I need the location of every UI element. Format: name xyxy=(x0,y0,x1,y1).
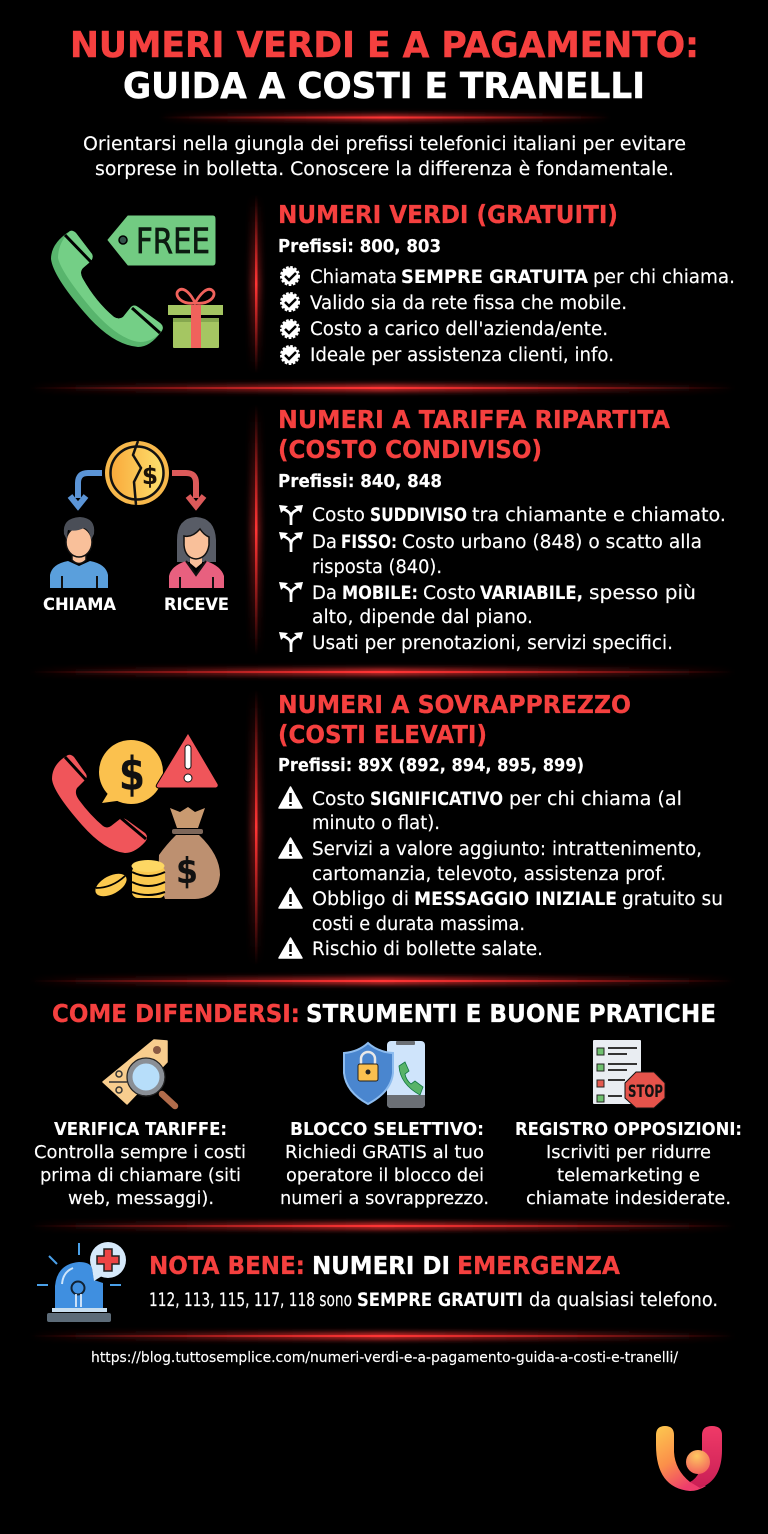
heading: NUMERI A TARIFFA RIPARTITA xyxy=(278,405,671,434)
icon: price tag with magnifier xyxy=(103,1040,175,1106)
bullet list: Servizi a valore aggiunto: intrattenimento, xyxy=(312,839,702,860)
prefixes: Prefissi: 800, 803 xyxy=(278,236,441,257)
icon: list with stop sign xyxy=(593,1040,665,1108)
heading xyxy=(278,405,671,464)
column text: numeri a sovrapprezzo. xyxy=(280,1188,489,1209)
icon: green phone, free tag and gift xyxy=(51,216,223,348)
bullet list xyxy=(279,505,726,654)
bullet list: per chi chiama. xyxy=(593,267,735,288)
column text: REGISTRO OPPOSIZIONI: xyxy=(515,1119,742,1140)
bullet list: risposta (840). xyxy=(312,557,442,578)
bullet list: MOBILE: xyxy=(342,583,418,604)
bullet list: Costo xyxy=(312,789,365,810)
column text: chiamate indesiderate. xyxy=(526,1188,731,1209)
icon: split coin with caller and receiver: CHIAMA xyxy=(43,595,116,614)
heading: NOTA BENE: xyxy=(149,1251,305,1280)
heading: come difendersi: STRUMENTI E BUONE PRATICHE xyxy=(306,999,716,1028)
panel: numeri verdi xyxy=(51,195,735,373)
panel: nota bene xyxy=(37,1242,718,1322)
column text xyxy=(515,1119,742,1209)
bullet list: Rischio di bollette salate. xyxy=(312,939,543,960)
bullet list: Costo xyxy=(423,583,476,604)
title xyxy=(70,25,699,107)
intro text: sorprese in bolletta. Conoscere la differenza è fondamentale. xyxy=(95,159,674,180)
column text: Richiedi GRATIS al tuo xyxy=(285,1142,484,1163)
column: registro opposizioni xyxy=(515,1040,742,1209)
heading: NUMERI DI xyxy=(312,1251,450,1280)
heading: come difendersi xyxy=(52,999,716,1028)
bullet list xyxy=(282,267,735,366)
heading: NUMERI VERDI (GRATUITI) xyxy=(278,200,618,229)
bullet list: Costo a carico dell'azienda/ente. xyxy=(310,319,608,340)
column text: telemarketing e xyxy=(557,1165,700,1186)
bullet list: gratuito su xyxy=(622,889,723,910)
icon: list with stop sign: STOP xyxy=(628,1082,663,1102)
bullet list: costi e durata massima. xyxy=(312,914,525,935)
heading: (COSTI ELEVATI) xyxy=(278,720,487,749)
title: GUIDA A COSTI E TRANELLI xyxy=(123,66,645,107)
bullet list: spesso più xyxy=(589,583,696,604)
title: NUMERI VERDI E A PAGAMENTO: xyxy=(70,25,699,66)
intro text: Orientarsi nella giungla dei prefissi telefonici italiani per evitare xyxy=(83,134,686,155)
bullet list: Costo urbano (848) o scatto alla xyxy=(402,532,702,553)
column text: prima di chiamare (siti xyxy=(40,1165,241,1186)
icon: emergency siren xyxy=(37,1242,126,1322)
column text: Iscriviti per ridurre xyxy=(546,1142,711,1163)
bullet list: Costo xyxy=(312,505,365,526)
bullet list: SEMPRE GRATUITA xyxy=(401,267,589,288)
icon: red phone, warning and money: $ xyxy=(119,747,145,801)
heading: come difendersi: COME DIFENDERSI: xyxy=(52,999,300,1028)
bullet list xyxy=(279,787,723,960)
source url: https://blog.tuttosemplice.com/numeri-verdi-e-a-pagamento-guida-a-costi-e-tranelli/ xyxy=(91,1350,678,1366)
emergency numbers text xyxy=(149,1290,718,1311)
bullet list: Ideale per assistenza clienti, info. xyxy=(310,345,614,366)
heading xyxy=(149,1251,621,1280)
icon: split coin with caller and receiver: RICEVE xyxy=(164,595,229,614)
heading xyxy=(278,690,631,749)
column text xyxy=(280,1119,489,1209)
column text: Controlla sempre i costi xyxy=(34,1142,246,1163)
heading: (COSTO CONDIVISO) xyxy=(278,435,542,464)
bullet list: Chiamata xyxy=(310,267,397,288)
bullet list: Usati per prenotazioni, servizi specifici. xyxy=(312,633,673,654)
emergency numbers text: da qualsiasi telefono. xyxy=(529,1290,718,1311)
icon: red phone, warning and money: $ xyxy=(176,851,198,892)
emergency numbers text: 112, 113, 115, 117, 118 sono xyxy=(149,1290,352,1311)
intro text xyxy=(83,134,686,180)
icon: shield and phone xyxy=(344,1041,425,1108)
bullet list: per chi chiama (al xyxy=(509,789,682,810)
bullet list: Da xyxy=(312,532,337,553)
bullet list: alto, dipende dal piano. xyxy=(312,607,533,628)
bullet list: Da xyxy=(312,583,337,604)
panel: sovrapprezzo xyxy=(52,690,723,965)
bullet list: Obbligo di xyxy=(312,889,409,910)
column text: operatore il blocco dei xyxy=(286,1165,484,1186)
heading: EMERGENZA xyxy=(457,1251,621,1280)
column: blocco selettivo xyxy=(280,1041,489,1209)
bullet list: SUDDIVISO xyxy=(370,505,467,526)
prefixes: Prefissi: 840, 848 xyxy=(278,471,442,492)
icon: split coin with caller and receiver: $ xyxy=(142,461,158,490)
bullet list: VARIABILE, xyxy=(480,583,583,604)
bullet list: SIGNIFICATIVO xyxy=(370,789,503,810)
bullet list: tra chiamante e chiamato. xyxy=(472,505,726,526)
bullet list: MESSAGGIO INIZIALE xyxy=(414,889,617,910)
logo xyxy=(656,1426,722,1491)
bullet list: FISSO: xyxy=(341,532,397,553)
icon: green phone, free tag and gift: FREE xyxy=(136,222,210,262)
column text: VERIFICA TARIFFE: xyxy=(54,1119,227,1140)
column text xyxy=(34,1119,246,1209)
panel: tariffa ripartita xyxy=(43,405,726,655)
column: verifica tariffe xyxy=(34,1040,246,1209)
icon: red phone, warning and money xyxy=(52,733,220,901)
column text: BLOCCO SELETTIVO: xyxy=(290,1119,484,1140)
emergency numbers text: SEMPRE GRATUITI xyxy=(357,1290,523,1311)
bullet list: Valido sia da rete fissa che mobile. xyxy=(310,293,627,314)
bullet list: cartomanzia, televoto, assistenza prof. xyxy=(312,864,666,885)
icon: split coin with caller and receiver xyxy=(43,441,229,614)
heading: NUMERI A SOVRAPPREZZO xyxy=(278,690,631,719)
prefixes: Prefissi: 89X (892, 894, 895, 899) xyxy=(278,755,584,776)
bullet list: minuto o flat). xyxy=(312,813,440,834)
column text: web, messaggi). xyxy=(68,1188,214,1209)
